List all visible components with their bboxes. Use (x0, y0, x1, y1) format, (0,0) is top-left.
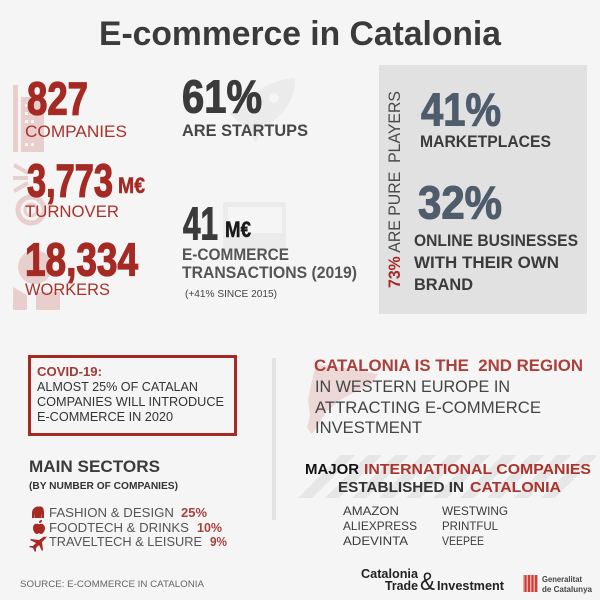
figure: marketplaces: MARKETPLACES (420, 133, 551, 151)
figure: marketplaces: 41% (421, 84, 501, 136)
panel: main sectors (29, 458, 227, 552)
value: traveltech: 9% (210, 534, 227, 549)
company list: left column: AMAZON (343, 504, 399, 518)
figure: 827 companies (25, 72, 127, 141)
company list: right column (442, 504, 508, 548)
icon: apple (33, 520, 45, 534)
logo: Catalonia Trade & Investment: & (420, 568, 435, 596)
icon: faded workers (13, 250, 60, 310)
sector: fashion: FASHION & DESIGN (49, 505, 174, 520)
icon: faded laptop (223, 202, 286, 250)
text: catalonia 2nd region (314, 357, 583, 437)
icon: plane (29, 536, 46, 552)
icon: faded rocket (229, 78, 295, 143)
figure: 827 companies: 827 (27, 72, 88, 124)
sector: traveltech: TRAVELTECH & LEISURE (49, 534, 202, 549)
icon: faded coins (13, 165, 44, 223)
figure: transactions: E-COMMERCE (182, 246, 289, 264)
logo: Catalonia Trade & Investment: Investment (437, 579, 505, 593)
company list: left column (343, 504, 417, 548)
striped band (298, 455, 596, 498)
text: catalonia 2nd region: IN WESTERN EUROPE IN (315, 378, 510, 396)
figure: workers (25, 234, 138, 299)
callout: covid-19: COMPANIES WILL INTRODUCE (37, 394, 224, 409)
wordmark: de Catalunya (542, 584, 592, 594)
subheading: (BY NUMBER OF COMPANIES) (29, 480, 178, 492)
company list: right column: VEEPEE (442, 534, 484, 548)
text: catalonia 2nd region: INVESTMENT (315, 419, 422, 437)
figure: turnover: M€ (118, 173, 145, 198)
logo: Catalonia Trade & Investment: Catalonia (361, 567, 419, 581)
title: E-commerce in Catalonia (99, 15, 502, 53)
figure: 61% startups (182, 70, 308, 140)
figure: workers: WORKERS (25, 281, 110, 299)
figure: turnover: 3,773 (27, 154, 113, 206)
logo: Generalitat de Catalunya (523, 574, 592, 594)
callout: covid-19 (30, 356, 236, 434)
company list: left column: ADEVINTA (343, 534, 408, 548)
figure: transactions: TRANSACTIONS (2019) (182, 264, 357, 282)
value: foodtech: 10% (197, 520, 222, 535)
logo: Catalonia Trade & Investment (361, 567, 505, 596)
icon: sweater (32, 506, 44, 518)
figure: transactions (182, 198, 357, 300)
heading: major international companies: ESTABLISHED IN (338, 479, 464, 496)
value: fashion: 25% (181, 505, 207, 520)
figure: online businesses (414, 176, 578, 294)
panel: investment ranking (307, 357, 583, 437)
callout: covid-19: ALMOST 25% OF CATALAN (37, 379, 198, 394)
logo: Catalonia Trade & Investment: Trade (385, 579, 418, 593)
figure: 61% startups: ARE STARTUPS (182, 122, 308, 140)
sector: foodtech: FOODTECH & DRINKS (49, 520, 189, 535)
figure: transactions: M€ (225, 217, 251, 242)
icon: senyera mark (523, 575, 538, 592)
icon: faded building (13, 85, 44, 152)
heading: main sectors: MAIN SECTORS (29, 458, 160, 476)
figure: turnover: TURNOVER (25, 203, 119, 221)
callout: covid-19: COVID-19: (37, 364, 102, 379)
heading: major international companies: INTERNATIONAL COMPANIES (364, 461, 591, 478)
text: catalonia 2nd region: CATALONIA IS THE 2ND REGION (314, 357, 583, 375)
panel background (379, 65, 587, 314)
wordmark (542, 574, 592, 594)
figure: marketplaces (420, 84, 551, 151)
panel: company key figures (13, 72, 145, 310)
heading: major international companies: MAJOR (305, 461, 359, 478)
panel: international companies (298, 455, 596, 548)
figure: online businesses: WITH THEIR OWN (414, 254, 559, 272)
figure: 827 companies: COMPANIES (25, 123, 127, 141)
panel: pure players (379, 65, 587, 314)
figure: online businesses: 32% (418, 176, 502, 228)
figure: online businesses: ONLINE BUSINESSES (414, 232, 578, 250)
figure: 61% startups: 61% (182, 70, 262, 122)
vertical label: 73% are pure players: 73% ARE PURE PLAYERS (386, 91, 404, 288)
text: catalonia 2nd region: ATTRACTING E-COMMERCE (315, 399, 541, 417)
figure: workers: 18,334 (25, 234, 138, 286)
icon: faded Catalonia map (307, 364, 378, 434)
figure: online businesses: BRAND (414, 276, 473, 294)
figure: transactions: 41 (183, 198, 218, 250)
company list: right column: WESTWING (442, 504, 508, 518)
company list: left column: ALIEXPRESS (343, 519, 417, 533)
heading: major international companies (305, 461, 591, 496)
figure: transactions: (+41% SINCE 2015) (185, 289, 277, 300)
wordmark: Generalitat (542, 574, 582, 584)
source: SOURCE: E-COMMERCE IN CATALONIA (20, 579, 205, 590)
company list: right column: PRINTFUL (442, 519, 498, 533)
callout: covid-19: E-COMMERCE IN 2020 (37, 409, 173, 424)
panel: startups and transactions (182, 70, 357, 300)
heading: major international companies: CATALONIA (470, 479, 561, 496)
